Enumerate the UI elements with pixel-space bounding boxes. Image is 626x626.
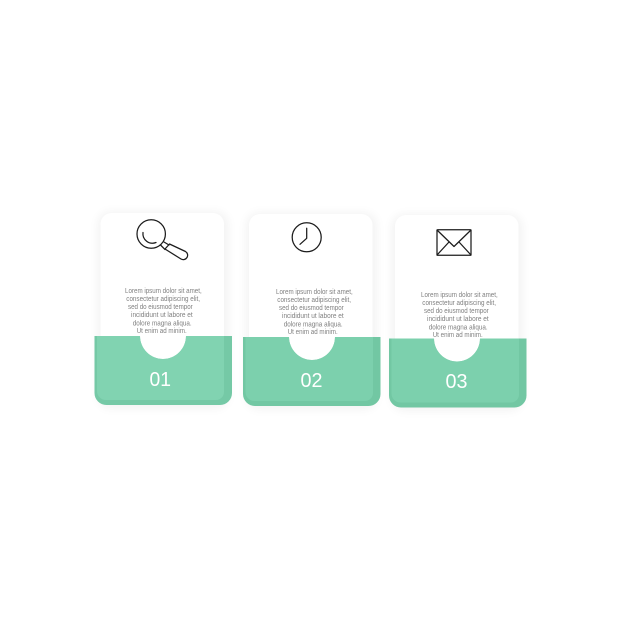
text block: sed do eiusmod tempor <box>128 304 193 311</box>
text block: Ut enim ad minim. <box>137 328 187 335</box>
card shadow <box>98 212 228 408</box>
panel: step 02 <box>243 213 380 409</box>
text block: Lorem ipsum dolor sit amet, <box>276 289 353 296</box>
white card <box>249 214 372 374</box>
text block: dolore magna aliqua. <box>284 321 343 328</box>
text block: consectetur adipiscing elit, <box>277 297 351 304</box>
text block: dolore magna aliqua. <box>133 320 192 327</box>
panel: step 03 <box>389 214 526 410</box>
text block <box>276 289 353 336</box>
number: 03 <box>446 370 468 393</box>
green tab inner <box>392 338 519 402</box>
green tab inner <box>246 337 373 401</box>
icon: envelope <box>437 230 471 255</box>
white card <box>100 213 224 373</box>
text block: sed do eiusmod tempor <box>279 305 344 312</box>
icon: clock <box>292 223 321 252</box>
text block <box>125 288 202 335</box>
text block: incididunt ut labore et <box>427 316 489 323</box>
text block: sed do eiusmod tempor <box>424 308 489 315</box>
icon: magnifying glass <box>137 220 188 260</box>
card shadow <box>246 213 376 409</box>
text block: consectetur adipiscing elit, <box>422 300 496 307</box>
green tab inner <box>97 336 224 400</box>
panel: step 01 <box>94 212 232 408</box>
white card <box>395 215 518 375</box>
text block: Lorem ipsum dolor sit amet, <box>125 288 202 295</box>
text block: dolore magna aliqua. <box>429 324 488 331</box>
number: 01 <box>150 368 171 391</box>
text block: Ut enim ad minim. <box>433 332 483 339</box>
green tab <box>243 337 380 406</box>
text block: incididunt ut labore et <box>282 313 344 320</box>
card shadow <box>392 214 522 410</box>
text block: Ut enim ad minim. <box>288 329 338 336</box>
text block: consectetur adipiscing elit, <box>126 296 200 303</box>
green tab <box>94 336 232 405</box>
number: 02 <box>300 369 322 392</box>
text block: incididunt ut labore et <box>131 312 193 319</box>
text block: Lorem ipsum dolor sit amet, <box>421 292 498 299</box>
green tab <box>389 338 526 408</box>
text block <box>421 292 498 339</box>
